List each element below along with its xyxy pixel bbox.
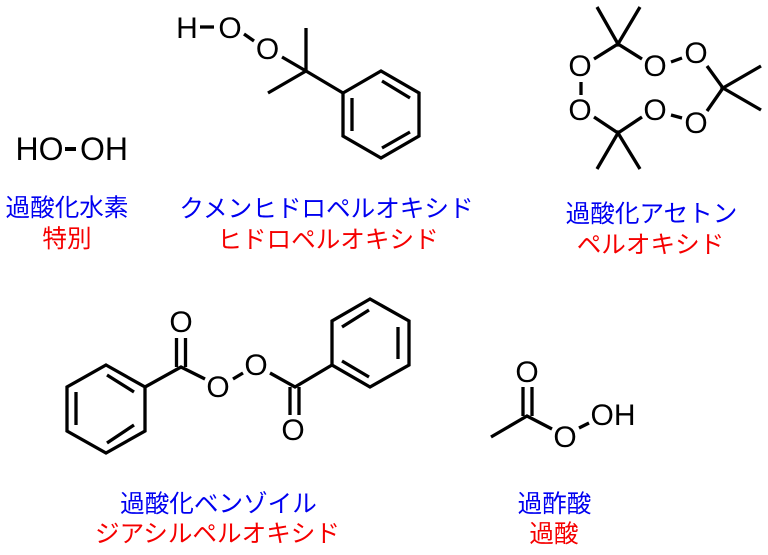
structure: peracetic acid: OH bbox=[590, 399, 636, 432]
label: acetone peroxide: 過酸化アセトン bbox=[566, 200, 737, 228]
structure: benzoyl peroxide: O bbox=[169, 306, 193, 339]
label: cumene hydroperoxide: ヒドロペルオキシド bbox=[217, 227, 439, 254]
structure: peracetic acid: O bbox=[515, 356, 539, 389]
structure: cumene hydroperoxide: H bbox=[176, 12, 198, 45]
label: hydrogen peroxide: 過酸化水素 bbox=[6, 194, 128, 222]
structure: acetone peroxide: O bbox=[643, 94, 667, 127]
label: hydrogen peroxide bbox=[6, 194, 128, 253]
structure: cumene hydroperoxide bbox=[176, 12, 419, 158]
structure: peracetic acid bbox=[491, 356, 636, 454]
label: benzoyl peroxide: 過酸化ベンゾイル bbox=[120, 490, 317, 518]
label: peracetic acid: 過酢酸 bbox=[518, 490, 592, 518]
label: benzoyl peroxide bbox=[95, 490, 340, 548]
label: peracetic acid: 過酸 bbox=[529, 520, 579, 548]
label: cumene hydroperoxide bbox=[179, 196, 474, 254]
structure: hydrogen peroxide: OH bbox=[80, 131, 128, 167]
structure: cumene hydroperoxide: O bbox=[256, 33, 279, 66]
structure: hydrogen peroxide bbox=[16, 131, 128, 167]
structure: benzoyl peroxide bbox=[67, 299, 409, 453]
structure: acetone peroxide: O bbox=[684, 37, 708, 70]
structure: cumene hydroperoxide: O bbox=[218, 12, 242, 45]
structure: benzoyl peroxide: O bbox=[244, 349, 268, 382]
label: acetone peroxide: ペルオキシド bbox=[577, 232, 724, 259]
label: cumene hydroperoxide: クメンヒドロペルオキシド bbox=[179, 196, 474, 223]
structure: benzoyl peroxide: O bbox=[206, 371, 230, 404]
structure: acetone peroxide: O bbox=[684, 107, 708, 140]
label: benzoyl peroxide: ジアシルペルオキシド bbox=[95, 521, 340, 548]
structure: peracetic acid: O bbox=[553, 421, 577, 454]
label: hydrogen peroxide: 特別 bbox=[42, 225, 92, 253]
label: acetone peroxide bbox=[566, 200, 737, 259]
structure: acetone peroxide bbox=[568, 7, 761, 169]
structure: hydrogen peroxide: HO bbox=[16, 131, 64, 167]
label: peracetic acid bbox=[518, 490, 592, 548]
structure: acetone peroxide: O bbox=[568, 94, 592, 127]
structure: acetone peroxide: O bbox=[643, 50, 667, 83]
structure: acetone peroxide: O bbox=[568, 50, 592, 83]
structure: benzoyl peroxide: O bbox=[281, 414, 305, 447]
